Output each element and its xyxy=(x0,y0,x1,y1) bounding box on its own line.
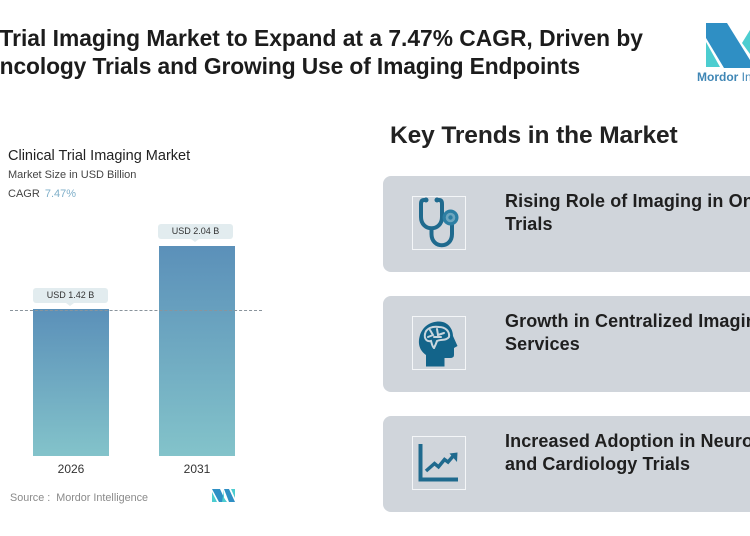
heading: key trends: Key Trends in the Market xyxy=(390,122,678,149)
CAGR label: CAGR 7.47% xyxy=(8,188,76,200)
icon: head with brain xyxy=(412,316,466,370)
card: centralized imaging xyxy=(383,296,750,392)
bar 2026 xyxy=(33,309,109,456)
small logo xyxy=(212,489,235,502)
value label 2026: USD 1.42 B xyxy=(47,290,94,300)
icon: rising line chart xyxy=(412,436,466,490)
card: neurology and cardiology xyxy=(383,416,750,512)
chart subtitle: Market Size in USD Billion xyxy=(8,169,136,181)
axis label 2026: 2026 xyxy=(58,462,84,476)
logo: Mordor Intelligence xyxy=(697,23,750,84)
title xyxy=(0,25,643,79)
card: rising role of imaging xyxy=(383,176,750,272)
value label 2031 xyxy=(158,224,233,239)
icon: stethoscope xyxy=(412,196,466,250)
value label 2031: USD 2.04 B xyxy=(172,226,219,236)
axis label 2031: 2031 xyxy=(184,462,210,476)
card text: and Cardiology Trials xyxy=(505,454,690,474)
card text xyxy=(505,311,750,354)
card text xyxy=(505,431,750,474)
card text xyxy=(505,191,750,234)
card text: Trials xyxy=(505,214,553,234)
chart panel: market size xyxy=(8,148,262,504)
value label 2026 xyxy=(33,288,108,303)
chart title: Clinical Trial Imaging Market xyxy=(8,148,190,164)
source: Source : Mordor Intelligence xyxy=(10,492,148,504)
card text: Services xyxy=(505,334,580,354)
bar 2031 xyxy=(159,246,235,456)
reference line xyxy=(10,310,262,311)
